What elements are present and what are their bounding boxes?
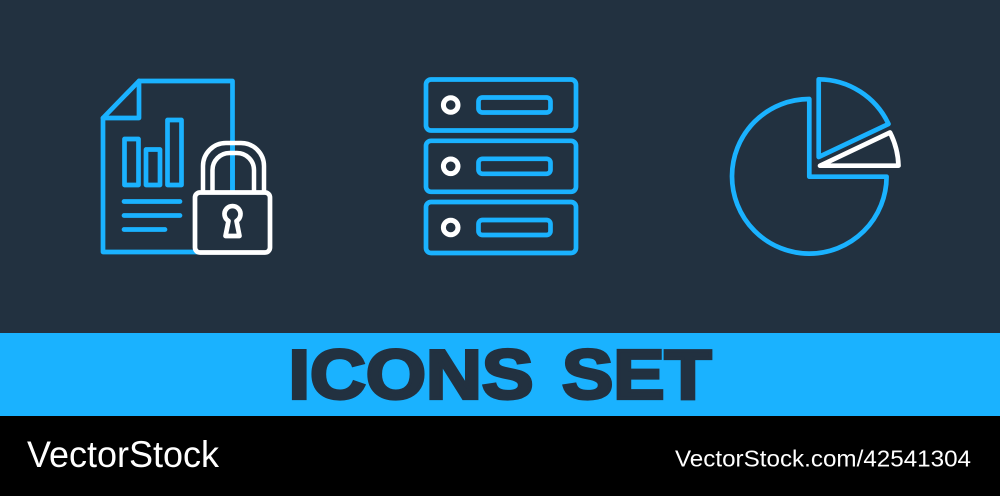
icon: pie chart (732, 79, 898, 254)
bar chart (124, 120, 182, 185)
padlock shackle (203, 143, 264, 192)
document outline (103, 81, 232, 252)
footer image id: VectorStock.com/42541304 (675, 446, 971, 472)
padlock (195, 141, 270, 252)
banner (0, 333, 1000, 416)
banner title (288, 336, 712, 414)
icon: server rack (426, 80, 576, 253)
banner title: ICONS (288, 336, 534, 414)
icon: document with chart and padlock (103, 81, 270, 252)
keyhole (224, 206, 240, 236)
pie small white slice (820, 132, 898, 166)
server unit 2 (426, 141, 576, 192)
footer bar (0, 416, 1000, 496)
document fold (103, 81, 139, 118)
text lines (124, 202, 180, 230)
banner title: SET (562, 336, 712, 414)
footer logo text: VectorStock (27, 434, 219, 475)
padlock body (195, 192, 270, 252)
server unit 3 (426, 202, 576, 253)
server unit 1 (426, 80, 576, 130)
pie upper slice (819, 79, 888, 157)
pie main slice (732, 99, 887, 254)
